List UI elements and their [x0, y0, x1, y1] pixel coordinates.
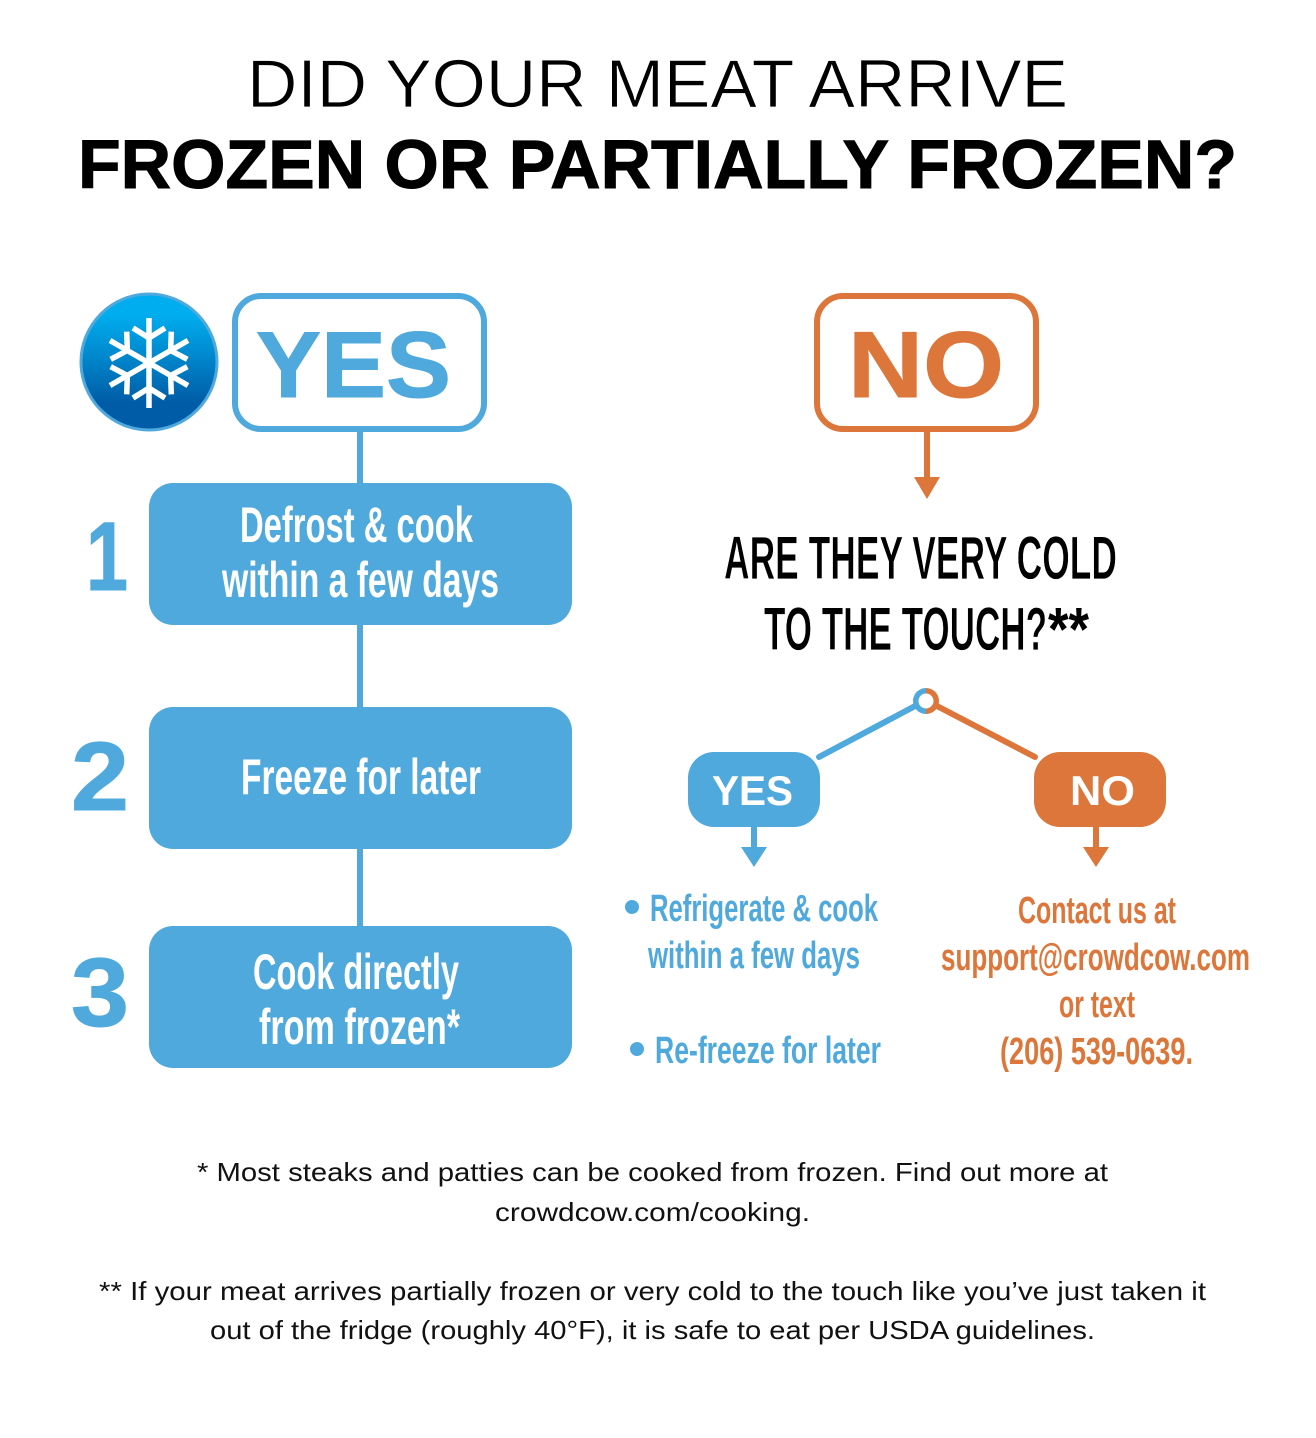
step 1 box — [149, 483, 572, 625]
arrow: no outcome — [1083, 826, 1109, 867]
step 2 box: Freeze for later — [241, 749, 481, 805]
yes outcome list: Refrigerate & cook — [650, 888, 879, 930]
yes outcome list: within a few days — [647, 935, 860, 977]
footnote 2: ** If your meat arrives partially frozen or very cold to the touch like you’ve just taken it — [99, 1276, 1207, 1306]
arrow: no to question — [914, 431, 940, 499]
footnote 1: crowdcow.com/cooking. — [495, 1197, 810, 1227]
step 1 number: 1 — [86, 502, 128, 611]
step 3 box — [149, 926, 572, 1068]
step 1 box: Defrost & cook — [240, 497, 473, 553]
footnote 1 — [197, 1157, 1109, 1227]
question heading — [724, 524, 1117, 663]
question heading: TO THE TOUCH? — [764, 595, 1047, 663]
connector: yes stem — [357, 430, 363, 930]
yes pill — [688, 752, 820, 827]
footnote 2 — [99, 1276, 1207, 1345]
icon: snowflake badge — [81, 294, 217, 430]
no header box — [817, 296, 1036, 429]
no pill: NO — [1070, 767, 1135, 814]
yes header box — [235, 296, 484, 429]
step 2 box — [149, 707, 572, 849]
no outcome contact: (206) 539-0639. — [1000, 1031, 1193, 1073]
no header box: NO — [848, 312, 1004, 417]
arrow: yes outcome — [741, 826, 767, 867]
yes header box: YES — [256, 312, 451, 417]
title — [78, 46, 1237, 203]
step 2 number: 2 — [71, 722, 129, 831]
yes outcome list: Re-freeze for later — [655, 1030, 881, 1072]
step 3 number: 3 — [71, 938, 129, 1047]
branch connector — [819, 688, 1035, 757]
footnote 2: out of the fridge (roughly 40°F), it is safe to eat per USDA guidelines. — [210, 1315, 1095, 1345]
title: FROZEN OR PARTIALLY FROZEN? — [78, 126, 1237, 203]
question heading: ** — [1048, 595, 1089, 663]
no pill — [1034, 752, 1166, 827]
no outcome contact: or text — [1059, 984, 1135, 1026]
title: DID YOUR MEAT ARRIVE — [247, 46, 1068, 122]
step 1 box: within a few days — [221, 552, 499, 608]
no outcome contact: Contact us at — [1018, 890, 1176, 932]
step 3 box: Cook directly — [253, 944, 459, 1000]
no outcome contact — [941, 890, 1250, 1073]
yes pill: YES — [712, 767, 793, 814]
yes outcome list — [625, 888, 881, 1072]
footnote 1: * Most steaks and patties can be cooked from frozen. Find out more at — [197, 1157, 1109, 1187]
step 3 box: from frozen* — [259, 999, 460, 1055]
